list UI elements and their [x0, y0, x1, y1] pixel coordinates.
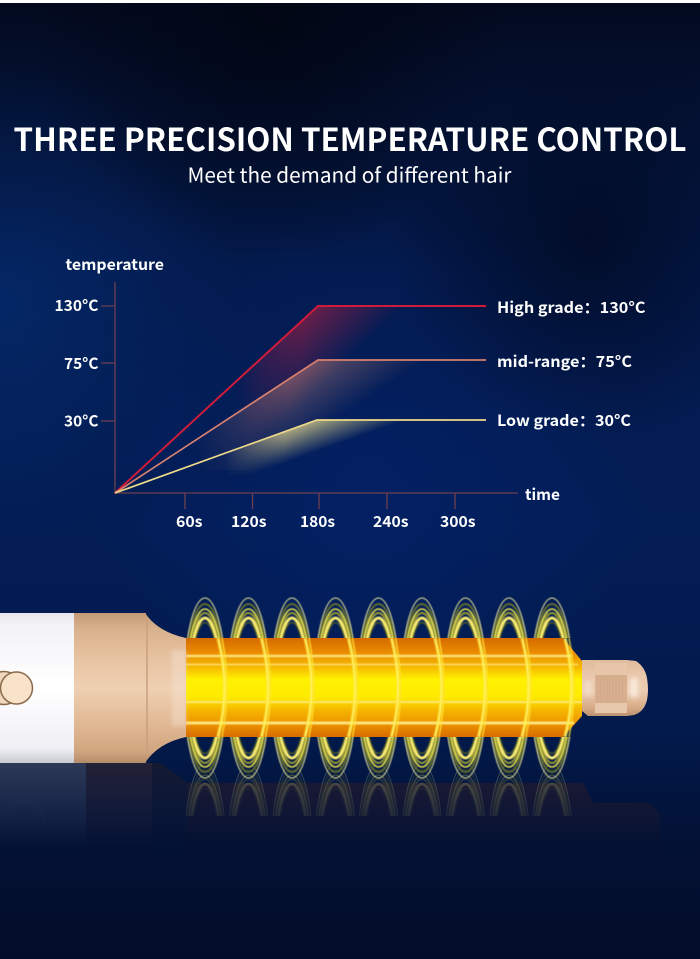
rose gold collar [74, 613, 186, 763]
heat rings behind barrel [184, 598, 573, 778]
line chart: temperature over time [54, 253, 646, 532]
x axis labels: 60s [176, 510, 203, 532]
rose gold tip [582, 660, 648, 716]
title: THREE PRECISION TEMPERATURE CONTROL [14, 115, 686, 161]
subtitle: Meet the demand of different hair [188, 158, 512, 188]
barrel light streaks [186, 656, 582, 723]
chart area fills [205, 307, 414, 472]
low grade line [115, 420, 486, 493]
white handle [0, 613, 74, 763]
series labels: Low grade：30°C [497, 409, 631, 431]
heat rings in front of barrel [218, 638, 574, 737]
x axis title: time [525, 483, 560, 505]
heated barrel [186, 638, 582, 737]
series labels: High grade：130°C [497, 296, 646, 318]
chart axes and ticks [101, 282, 518, 509]
y axis labels: 130°C [54, 294, 98, 316]
x axis labels: 240s [373, 510, 409, 532]
reflection of the curling tool [0, 763, 660, 835]
y axis title: temperature [66, 253, 164, 275]
series labels [497, 296, 646, 431]
handle button [0, 672, 32, 704]
x axis labels [176, 510, 476, 532]
y axis labels: 75°C [64, 352, 98, 374]
series labels: mid-range：75°C [497, 350, 632, 372]
mid-range line [115, 360, 486, 493]
x axis labels: 120s [231, 510, 267, 532]
y axis labels [54, 294, 98, 432]
y axis labels: 30°C [64, 410, 98, 432]
x axis labels: 180s [300, 510, 335, 532]
x axis labels: 300s [440, 510, 476, 532]
curling tool [0, 598, 648, 778]
high grade line [115, 306, 486, 493]
